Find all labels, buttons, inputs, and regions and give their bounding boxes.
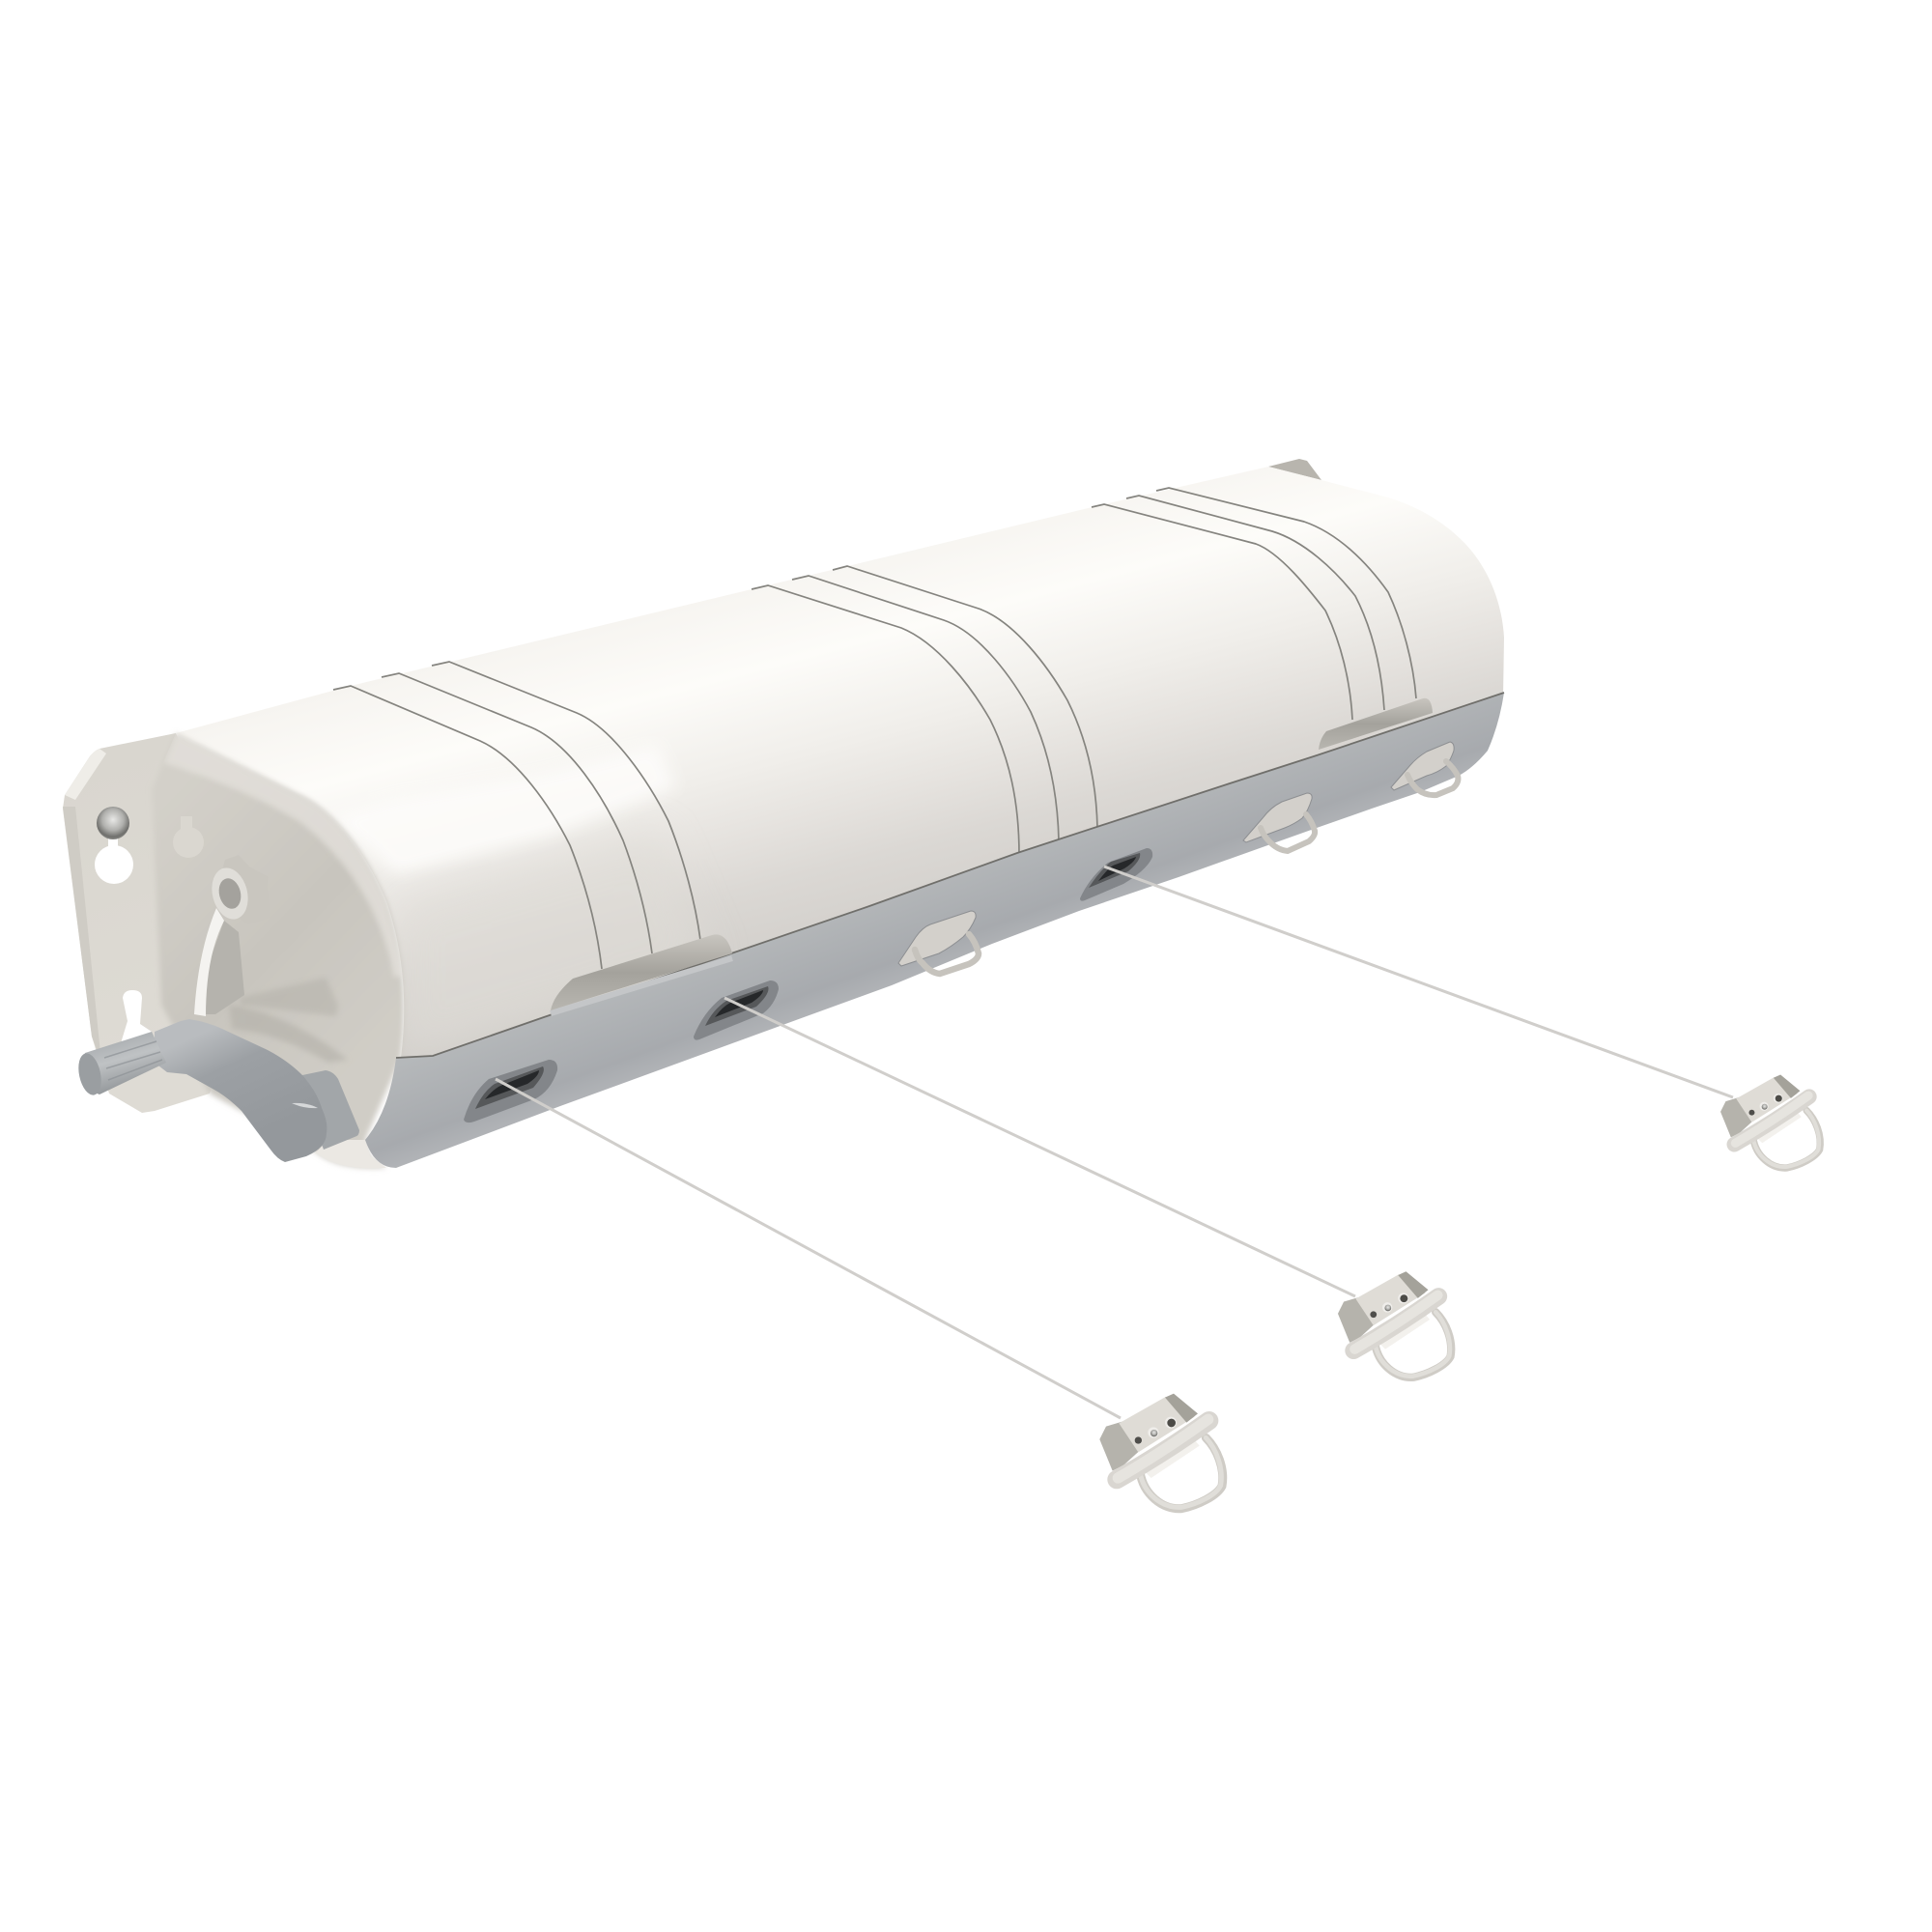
slot 2 [694, 980, 779, 1040]
hook 3 [1720, 1075, 1820, 1168]
icon: keyhole [95, 838, 133, 884]
cord guide interior [200, 921, 244, 1014]
notch left [551, 934, 732, 1010]
handle glint [292, 1103, 318, 1108]
grey base bar [365, 693, 1504, 1168]
handle arm [155, 1019, 327, 1162]
cap ghost keyhole [173, 816, 204, 858]
winding handle [75, 1019, 359, 1162]
icon: top screw [97, 807, 129, 839]
wall bracket [63, 459, 1321, 1113]
shell highlight band [354, 755, 668, 873]
cap top lighter band [164, 733, 406, 978]
icon: lower slot [121, 990, 152, 1043]
band lines group 1 [333, 662, 700, 969]
main shell body [176, 467, 1504, 1087]
wire 3 [1104, 867, 1733, 1097]
cap inner arc shadow [229, 1005, 348, 1063]
cap inner shadow block [242, 980, 337, 1015]
wire 2 [724, 998, 1355, 1296]
D-ring 2 on bar [1243, 793, 1315, 851]
D-ring 1 on bar [898, 911, 979, 974]
hook 1 [1099, 1394, 1223, 1509]
band lines group 2 [752, 566, 1097, 855]
handle knob [75, 1032, 166, 1097]
handle pivot cap [302, 1070, 359, 1150]
illustration: retractable clothesline [63, 459, 1824, 1513]
notch right [1319, 698, 1433, 750]
cord guide groove [194, 908, 224, 1016]
slot 3 [1080, 848, 1152, 901]
D-ring 3 on bar [1391, 742, 1458, 795]
hook 2 [1338, 1271, 1451, 1378]
end cap [152, 733, 406, 1168]
slot 1 [464, 1060, 557, 1122]
wire 1 [496, 1079, 1121, 1418]
cap lower rim [316, 1140, 386, 1168]
cord guide nut [207, 855, 270, 924]
band lines group 3 [1092, 488, 1416, 720]
shell left lower facet [399, 831, 715, 1063]
bracket far tab [1268, 459, 1321, 480]
